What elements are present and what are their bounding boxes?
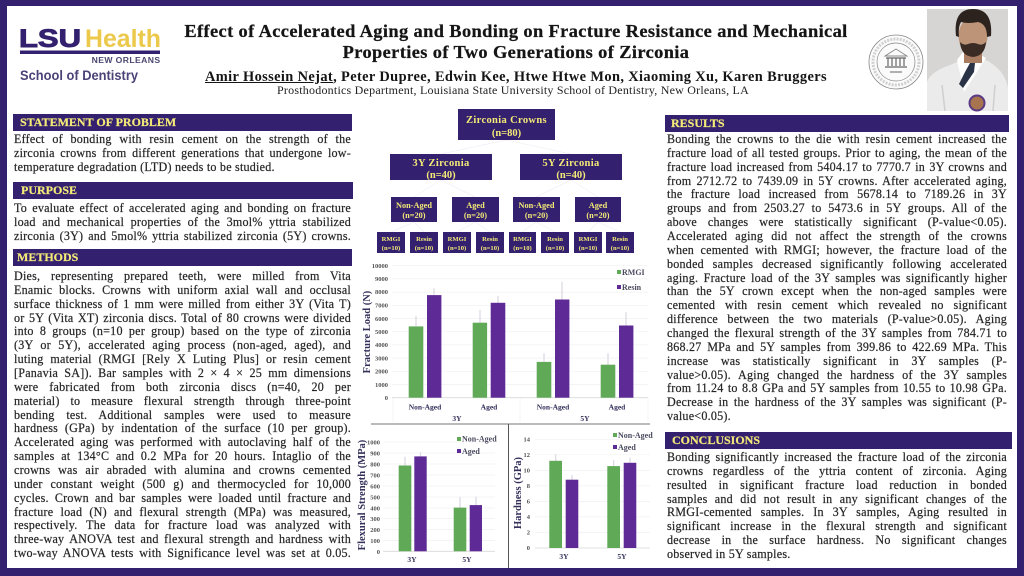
bar chart: fracture load: 4000 xyxy=(375,342,388,349)
boxes: cement groups: (n=10) xyxy=(481,245,499,252)
bar chart: flexural strength: 300 xyxy=(370,516,380,523)
bar chart: fracture load: 5000 xyxy=(375,329,388,336)
boxes: cement groups: (n=10) xyxy=(415,245,433,252)
box: 5Y zirconia: 5Y Zirconia xyxy=(542,158,600,169)
boxes: cement groups: (n=10) xyxy=(382,245,400,252)
dividers xyxy=(371,423,650,425)
icon: academy seal xyxy=(869,35,923,89)
boxes: aging groups: (n=20) xyxy=(402,211,426,220)
bar chart: fracture load: 8000 xyxy=(375,289,388,296)
bar chart: hardness: Aged xyxy=(618,443,636,452)
title: Properties of Two Generations of Zirconia xyxy=(343,42,689,62)
boxes: aging groups: Non-Aged xyxy=(396,201,432,210)
bar chart: flexural strength: 5Y xyxy=(462,555,472,564)
bar chart: hardness: 2 xyxy=(527,530,530,536)
boxes: cement groups: (n=10) xyxy=(448,245,466,252)
bar chart: fracture load: Aged xyxy=(609,402,626,412)
flowchart: study groups xyxy=(377,109,634,253)
heading: statement of problem xyxy=(13,114,352,131)
bar chart: flexural strength xyxy=(357,434,497,564)
boxes: cement groups: Resin xyxy=(482,236,498,243)
boxes: cement groups: (n=10) xyxy=(579,245,597,252)
heading: methods: METHODS xyxy=(17,250,78,264)
heading: results: RESULTS xyxy=(671,116,725,130)
bar chart: hardness xyxy=(513,431,653,561)
logo: LSU Health New Orleans School of Dentistry: Health xyxy=(85,25,161,53)
bar chart: flexural strength: 200 xyxy=(370,527,380,534)
bar chart: flexural strength: 3Y xyxy=(407,555,417,564)
logo: LSU Health New Orleans School of Dentistry: LSU xyxy=(19,25,81,53)
bar chart: flexural strength: Non-Aged xyxy=(462,434,497,444)
boxes: aging groups: Non-Aged xyxy=(519,201,555,210)
box: 5Y zirconia: (n=40) xyxy=(556,170,586,181)
boxes: cement groups: Resin xyxy=(547,236,563,243)
heading: purpose: PURPOSE xyxy=(21,183,77,197)
bar chart: flexural strength: Aged xyxy=(462,447,480,456)
bar chart: flexural strength: 0 xyxy=(377,549,380,556)
heading: conclusions: CONCLUSIONS xyxy=(672,433,760,447)
bar chart: hardness: 6 xyxy=(527,498,531,506)
boxes: aging groups: Aged xyxy=(589,201,608,210)
bar chart: hardness: 14 xyxy=(524,436,531,444)
bar chart: flexural strength: 800 xyxy=(370,462,380,468)
text: purpose xyxy=(14,202,351,243)
bar chart: fracture load: Resin xyxy=(622,283,642,292)
bar chart: fracture load: Non-Aged xyxy=(537,402,570,412)
bar chart: hardness: 0 xyxy=(527,545,530,552)
box: 3Y zirconia: (n=40) xyxy=(426,170,456,181)
text: statement of problem xyxy=(14,133,351,174)
bar chart: hardness: 12 xyxy=(524,452,530,459)
bar chart: flexural strength: 400 xyxy=(370,506,380,512)
bar chart: hardness: 5Y xyxy=(617,552,627,561)
bar chart: fracture load: 6000 xyxy=(375,316,388,323)
bar chart: fracture load: 5Y xyxy=(580,414,590,423)
text: methods xyxy=(14,270,351,560)
boxes: cement groups: Resin xyxy=(416,236,432,243)
heading: results xyxy=(665,115,1009,132)
box: 3Y zirconia xyxy=(390,154,492,181)
bar chart: flexural strength: Flexural Strength (MPa) xyxy=(357,439,368,550)
bar chart: hardness: Non-Aged xyxy=(618,431,653,440)
box: zirconia crowns: Zirconia Crowns xyxy=(466,115,547,126)
box: zirconia crowns: (n=80) xyxy=(492,128,522,139)
bar chart: fracture load: Fracture Load (N) xyxy=(362,290,373,373)
heading: statement of problem: STATEMENT OF PROBLEM xyxy=(20,115,176,129)
logo: LSU Health New Orleans School of Dentistry xyxy=(19,25,161,83)
bar chart: fracture load: RMGI xyxy=(622,268,645,277)
photo: presenter portrait xyxy=(927,9,1008,111)
title: Effect of Accelerated Aging and Bonding on Fracture Resistance and Mechanical xyxy=(184,21,848,41)
authors: Amir Hossein Nejat, Peter Dupree, Edwin Kee, Htwe Htwe Mon, Xiaoming Xu, Karen Bruggers xyxy=(205,69,827,85)
box: 3Y zirconia: 3Y Zirconia xyxy=(412,158,470,169)
boxes: cement groups: RMGI xyxy=(448,236,467,243)
boxes: aging groups xyxy=(391,197,621,222)
boxes: cement groups: (n=10) xyxy=(513,245,532,252)
bar chart: fracture load xyxy=(362,263,648,423)
boxes: aging groups: Aged xyxy=(466,201,485,210)
bar chart: hardness: Hardness (GPa) xyxy=(513,456,524,529)
heading: conclusions xyxy=(665,432,1012,449)
boxes: aging groups: (n=20) xyxy=(525,211,548,220)
heading: methods xyxy=(13,249,352,266)
bar chart: hardness: 8 xyxy=(527,483,531,490)
bar chart: fracture load: Non-Aged xyxy=(409,402,442,412)
bar chart: fracture load: 3Y xyxy=(452,414,462,423)
boxes: aging groups: (n=20) xyxy=(586,211,610,220)
boxes: cement groups: RMGI xyxy=(513,236,532,243)
bar chart: fracture load: 0 xyxy=(385,395,388,402)
bar chart: fracture load: 3000 xyxy=(375,356,388,362)
bar chart: flexural strength: 100 xyxy=(370,538,380,545)
bar chart: hardness: 10 xyxy=(524,468,530,474)
heading: purpose xyxy=(13,182,353,199)
boxes: cement groups: (n=10) xyxy=(546,245,564,252)
bar chart: hardness: 3Y xyxy=(559,552,569,561)
text: results xyxy=(667,133,1007,423)
affiliation: Prosthodontics Department, Louisiana State University School of Dentistry, New Orleans, LA xyxy=(277,83,749,97)
boxes: cement groups: Resin xyxy=(612,236,628,243)
boxes: cement groups xyxy=(377,232,634,253)
title xyxy=(184,21,848,62)
boxes: cement groups: RMGI xyxy=(382,236,401,243)
box: 5Y zirconia xyxy=(520,154,622,181)
bar chart: fracture load: 10000 xyxy=(372,263,388,270)
box: zirconia crowns xyxy=(458,109,555,140)
bar chart: flexural strength: 900 xyxy=(370,450,380,458)
logo: LSU Health New Orleans School of Dentistry: School of Dentistry xyxy=(20,67,138,83)
bar chart: fracture load: Aged xyxy=(481,402,498,412)
bar chart: fracture load: 9000 xyxy=(375,276,388,283)
bar chart: flexural strength: 1000 xyxy=(367,440,380,446)
logo: LSU Health New Orleans School of Dentistry: NEW ORLEANS xyxy=(92,55,160,65)
bar chart: flexural strength: 600 xyxy=(370,484,380,490)
bar chart: hardness: 4 xyxy=(527,514,531,521)
bar chart: fracture load: 2000 xyxy=(375,368,388,376)
bar chart: flexural strength: 500 xyxy=(370,494,380,502)
bar chart: fracture load: 1000 xyxy=(375,382,388,389)
bar chart: flexural strength: 700 xyxy=(370,472,380,480)
bar chart: fracture load: 7000 xyxy=(375,302,388,310)
boxes: cement groups: (n=10) xyxy=(611,245,629,252)
text: conclusions xyxy=(667,451,1007,561)
boxes: cement groups: RMGI xyxy=(579,236,598,243)
boxes: aging groups: (n=20) xyxy=(464,211,487,220)
